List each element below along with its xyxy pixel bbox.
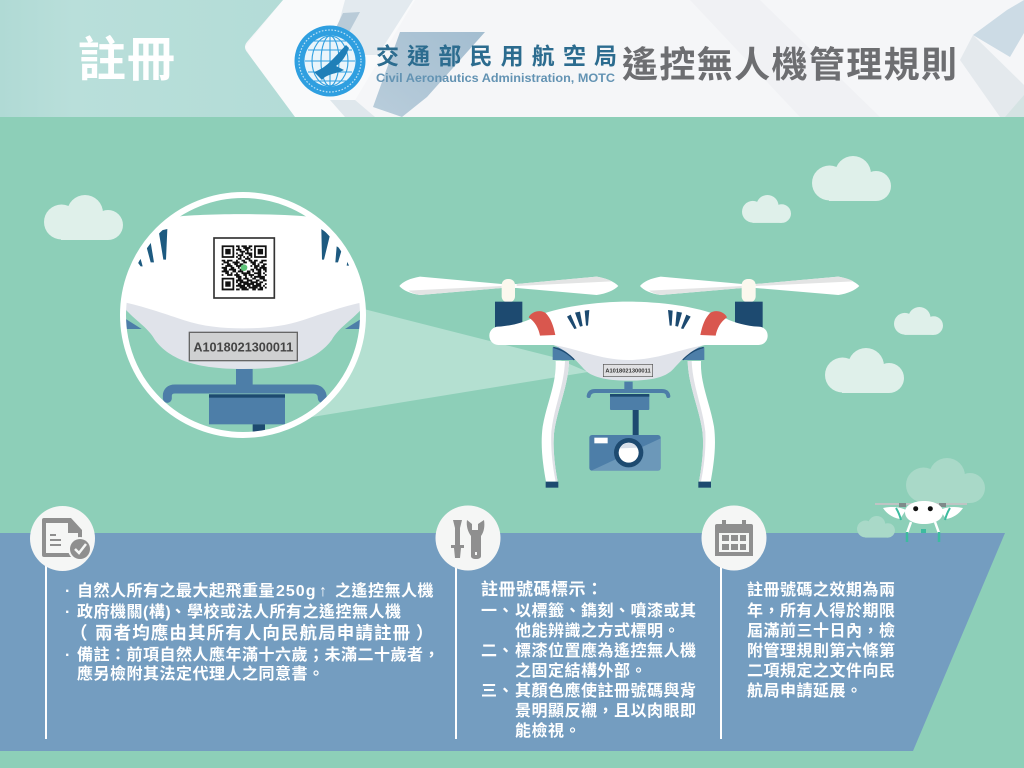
registration label: A1018021300011: [193, 340, 293, 355]
text: registration eligibility: 應另檢附其法定代理人之同意書。: [77, 664, 325, 683]
registration label on drone: A1018021300011: [605, 368, 651, 374]
QR code: [214, 238, 274, 298]
logo: Civil Aeronautics Administration seal: [294, 26, 366, 96]
text: marking rules: 三、: [481, 683, 514, 700]
registration label on drone: [603, 364, 653, 377]
magnified detail circle: [110, 195, 377, 435]
registration label: [189, 332, 297, 361]
text: registration eligibility: （: [70, 623, 89, 643]
drone illustration: [399, 277, 859, 488]
text: registration eligibility: 250g: [276, 583, 316, 600]
column 2: how to mark: [436, 506, 697, 740]
text: marking rules: 之固定結構外部。: [515, 661, 647, 680]
text: registration eligibility: 之遙控無人機: [335, 581, 434, 600]
gimbal: [167, 369, 322, 434]
text: marking rules: 其顏色應使註冊號碼與背: [515, 681, 697, 700]
text: registration eligibility: (構): [143, 602, 171, 621]
text: registration eligibility: 學校或法人所有之遙控無人機: [187, 602, 402, 621]
text: registration eligibility: 自然人所有之最大起飛重量: [77, 583, 275, 600]
main title: 遙控無人機管理規則: [622, 44, 957, 85]
text: registration eligibility: ）: [416, 623, 435, 643]
magnifier beam: [312, 303, 588, 417]
icon: document with check: [42, 518, 92, 561]
text: validity period: 年，所有人得於期限: [747, 601, 896, 620]
text: registration eligibility: 備註：前項自然人應年滿十六歲；未滿二十歲者，: [77, 645, 440, 664]
text: marking rules: 能檢視。: [515, 721, 581, 740]
clouds: [44, 156, 943, 393]
text: registration eligibility: ·: [65, 604, 71, 621]
vents right: [321, 229, 349, 266]
agency name: Civil Aeronautics Administration, MOTC: [376, 71, 615, 85]
cloud: small: [857, 516, 895, 538]
cloud: behind mascot: [906, 458, 985, 503]
text: marking rules: [481, 579, 697, 740]
underside mounts: [126, 319, 360, 329]
column 1: who must register: [30, 506, 440, 739]
landing legs: [542, 361, 715, 488]
text: registration eligibility: ·: [65, 647, 71, 664]
text: validity period: [747, 580, 896, 700]
icon: screwdriver and wrench: [451, 520, 484, 559]
text: validity period: 附管理規則第六條第: [747, 641, 896, 660]
icon: calendar: [715, 520, 753, 556]
text: marking rules: 景明顯反襯，且以肉眼即: [515, 701, 697, 720]
propeller: left: [399, 277, 618, 302]
propeller: right: [640, 277, 859, 302]
motors: [495, 302, 763, 328]
text: marking rules: 他能辨識之方式標明。: [515, 621, 680, 640]
text: validity period: 二項規定之文件向民: [747, 661, 896, 680]
body underside: [126, 302, 360, 369]
text: validity period: 屆滿前三十日內，檢: [747, 621, 896, 640]
mini drone mascot with clouds: [857, 458, 985, 542]
text: registration eligibility: 兩者均應由其所有人向民航局申請註冊: [95, 623, 411, 643]
text: marking rules: 一、: [481, 603, 514, 620]
gimbal mounts: [553, 347, 704, 360]
body top: [126, 214, 360, 328]
text: marking rules: 以標籤、鐫刻、噴漆或其: [515, 601, 697, 620]
text: registration eligibility: [65, 581, 440, 683]
text: registration eligibility: ↑: [319, 583, 328, 600]
gimbal and camera: [589, 382, 668, 471]
text: marking rules: 標漆位置應為遙控無人機: [515, 641, 697, 660]
text: validity period: 註冊號碼之效期為兩: [747, 580, 896, 599]
heading: section title: 註冊: [78, 34, 176, 87]
blue information panel: [0, 506, 1005, 751]
text: registration eligibility: 、: [170, 604, 187, 621]
agency name: 交通部民用航空局: [376, 43, 617, 69]
text: registration eligibility: ·: [65, 583, 71, 600]
header banner: [0, 0, 1024, 117]
text: marking rules: 二、: [481, 643, 514, 660]
text: validity period: 航局申請延展。: [747, 681, 863, 700]
text: registration eligibility: 政府機關: [77, 604, 143, 621]
text: marking rules: 註冊號碼標示：: [481, 579, 604, 599]
agency name: [376, 43, 617, 85]
column 3: validity: [702, 506, 896, 739]
vents left: [138, 229, 167, 266]
drone body: [489, 302, 768, 381]
